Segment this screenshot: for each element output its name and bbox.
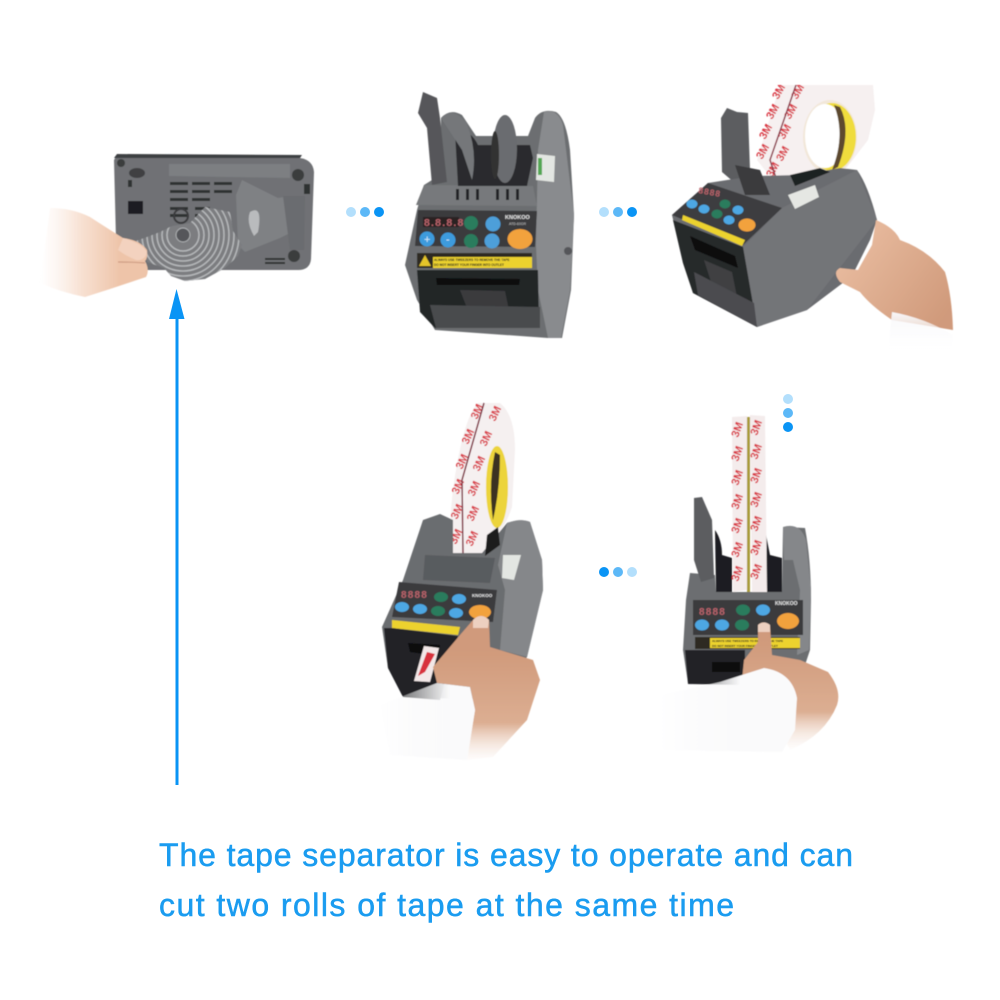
- 3M print: 3M: [749, 539, 765, 557]
- yellow warning strip: [682, 215, 745, 246]
- yellow warning strip: [695, 637, 800, 649]
- green tape label: [502, 555, 521, 580]
- striped separator disc: [136, 206, 240, 282]
- dispenser body: [683, 527, 811, 683]
- buttons: [420, 216, 532, 249]
- dots between step 1 and 2: [346, 207, 384, 217]
- white shirt sleeve: [380, 683, 475, 760]
- caption text: cut two rolls of tape at the same time: [159, 887, 734, 923]
- 3M print: 3M: [448, 527, 465, 546]
- yellow warning strip: ALWAYS USE TWEEZERS TO REMOVE THE TAPE: [434, 258, 510, 262]
- 3M print: 3M: [764, 102, 782, 122]
- hand pressing: [433, 616, 540, 760]
- green tape label: [536, 154, 555, 182]
- buttons: +: [424, 234, 430, 246]
- 3M print: 3M: [730, 421, 746, 439]
- step 4: single roll mounted, thumb on cut button: [380, 402, 543, 760]
- caption text: [159, 837, 853, 923]
- tape end emerging: [414, 646, 439, 682]
- 3M print: 3M: [774, 144, 792, 164]
- hand holding side: [836, 220, 953, 330]
- cutter opening: [685, 650, 745, 685]
- panel: [672, 183, 782, 245]
- vent slots: [128, 180, 310, 264]
- buttons: -: [446, 234, 450, 246]
- panel: [392, 582, 497, 622]
- 3M print: 3M: [749, 491, 765, 509]
- arm and finger: [742, 622, 838, 750]
- dots between step 5 and 4: [599, 567, 637, 577]
- 3M print: 3M: [460, 427, 477, 446]
- yellow warning strip: [417, 253, 532, 268]
- segment display: [423, 217, 459, 227]
- device base plate: [114, 155, 314, 270]
- flip handle: [418, 92, 447, 185]
- 3M print: 3M: [730, 517, 746, 535]
- yellow core: [486, 446, 508, 528]
- 3M print: 3M: [730, 541, 746, 559]
- step 3: loading tape, angled dispenser: 8888: [698, 185, 722, 199]
- 3M print: 3M: [749, 467, 765, 485]
- flip handle: [721, 108, 750, 190]
- green tape label: [788, 185, 819, 209]
- 3M print: 3M: [449, 502, 466, 521]
- 3M print: 3M: [789, 82, 807, 102]
- 3M print: 3M: [754, 142, 772, 162]
- dispenser hood: [672, 168, 877, 327]
- hand holding disc: [40, 208, 148, 297]
- 3M print: 3M: [478, 429, 495, 448]
- spindle area: [735, 165, 770, 195]
- panel buttons: [395, 592, 491, 619]
- center separator disc: [493, 115, 517, 183]
- step 4: single roll mounted, thumb on cut button: 8888: [401, 590, 428, 601]
- dots between step 3 and 5 (vertical): [783, 394, 793, 432]
- 3M print: 3M: [450, 477, 467, 496]
- 3M print: 3M: [465, 504, 482, 523]
- tape roll: [448, 402, 515, 553]
- yellow warning strip: DO NOT INSERT YOUR FINGER INTO OUTLET: [434, 263, 504, 267]
- 3M print: 3M: [749, 443, 765, 461]
- blue upward arrow: [169, 289, 184, 785]
- panel buttons: [695, 604, 799, 630]
- vented top: [456, 189, 519, 200]
- rubber feet: [292, 169, 304, 181]
- 3M print: 3M: [466, 479, 483, 498]
- 3M print: 3M: [471, 454, 488, 473]
- brand plate: KNOKOO: [775, 601, 798, 607]
- step 1: device underside with hand removing separator: [40, 154, 314, 301]
- 3M print: 3M: [764, 160, 782, 180]
- dots between step 2 and 3: [599, 207, 637, 217]
- 3M print: 3M: [730, 565, 746, 583]
- step 3: loading tape, angled dispenser: [672, 82, 953, 350]
- flip handle: [694, 497, 714, 582]
- yellow warning strip: ALWAYS USE TWEEZERS TO REMOVE THE TAPE: [712, 639, 783, 643]
- white shirt sleeve: [660, 668, 797, 752]
- tape spool cavity: [455, 131, 533, 186]
- tape roll: [756, 84, 875, 176]
- 3M print: 3M: [749, 563, 765, 581]
- 3M print: [756, 84, 805, 176]
- caption text: The tape separator is easy to operate and can: [159, 837, 853, 873]
- 3M print: 3M: [782, 102, 800, 122]
- 3M print: 3M: [464, 529, 481, 548]
- front black face: [384, 628, 458, 700]
- front cutter opening: [417, 270, 539, 328]
- 3M print: 3M: [454, 452, 471, 471]
- step 2: dispenser front view, no tape: ATD-60GR: [509, 222, 527, 226]
- front black face: [673, 220, 757, 327]
- yellow warning strip: [392, 620, 460, 635]
- step 5: threaded tape, finger pressing button: 8888: [699, 607, 726, 618]
- 3M print: 3M: [749, 515, 765, 533]
- brand plate: KNOKOO: [472, 593, 493, 598]
- 3M print: 3M: [487, 404, 504, 423]
- yellow warning strip: DO NOT INSERT YOUR FINGER INTO OUTLET: [712, 644, 778, 648]
- infographic page: [50, 84, 954, 923]
- step 2: dispenser front view, no tape: 8.8.8.8: [424, 217, 465, 229]
- 3M print: [730, 419, 765, 583]
- 3M print: 3M: [469, 402, 486, 421]
- 3M print: [448, 402, 504, 548]
- yellow tape core: [803, 100, 857, 174]
- step 2: dispenser front view, no tape: [405, 92, 574, 338]
- step 5: threaded tape, finger pressing button: [660, 415, 838, 752]
- 3M print: 3M: [730, 493, 746, 511]
- brand plate: KNOKOO: [505, 215, 530, 221]
- two tape strips: [730, 415, 767, 592]
- dispenser body: [405, 111, 574, 338]
- 3M print: 3M: [749, 419, 765, 437]
- 3M print: 3M: [770, 82, 788, 102]
- dark rollers: [715, 530, 732, 592]
- panel: [693, 600, 803, 635]
- 3M print: 3M: [730, 445, 746, 463]
- 3M print: 3M: [757, 122, 775, 142]
- white shirt cuff: [888, 312, 953, 350]
- dispenser body: [382, 514, 543, 700]
- 3M print: 3M: [776, 122, 794, 142]
- control panel: [415, 210, 537, 247]
- 3M print: 3M: [730, 469, 746, 487]
- panel buttons: [686, 200, 756, 232]
